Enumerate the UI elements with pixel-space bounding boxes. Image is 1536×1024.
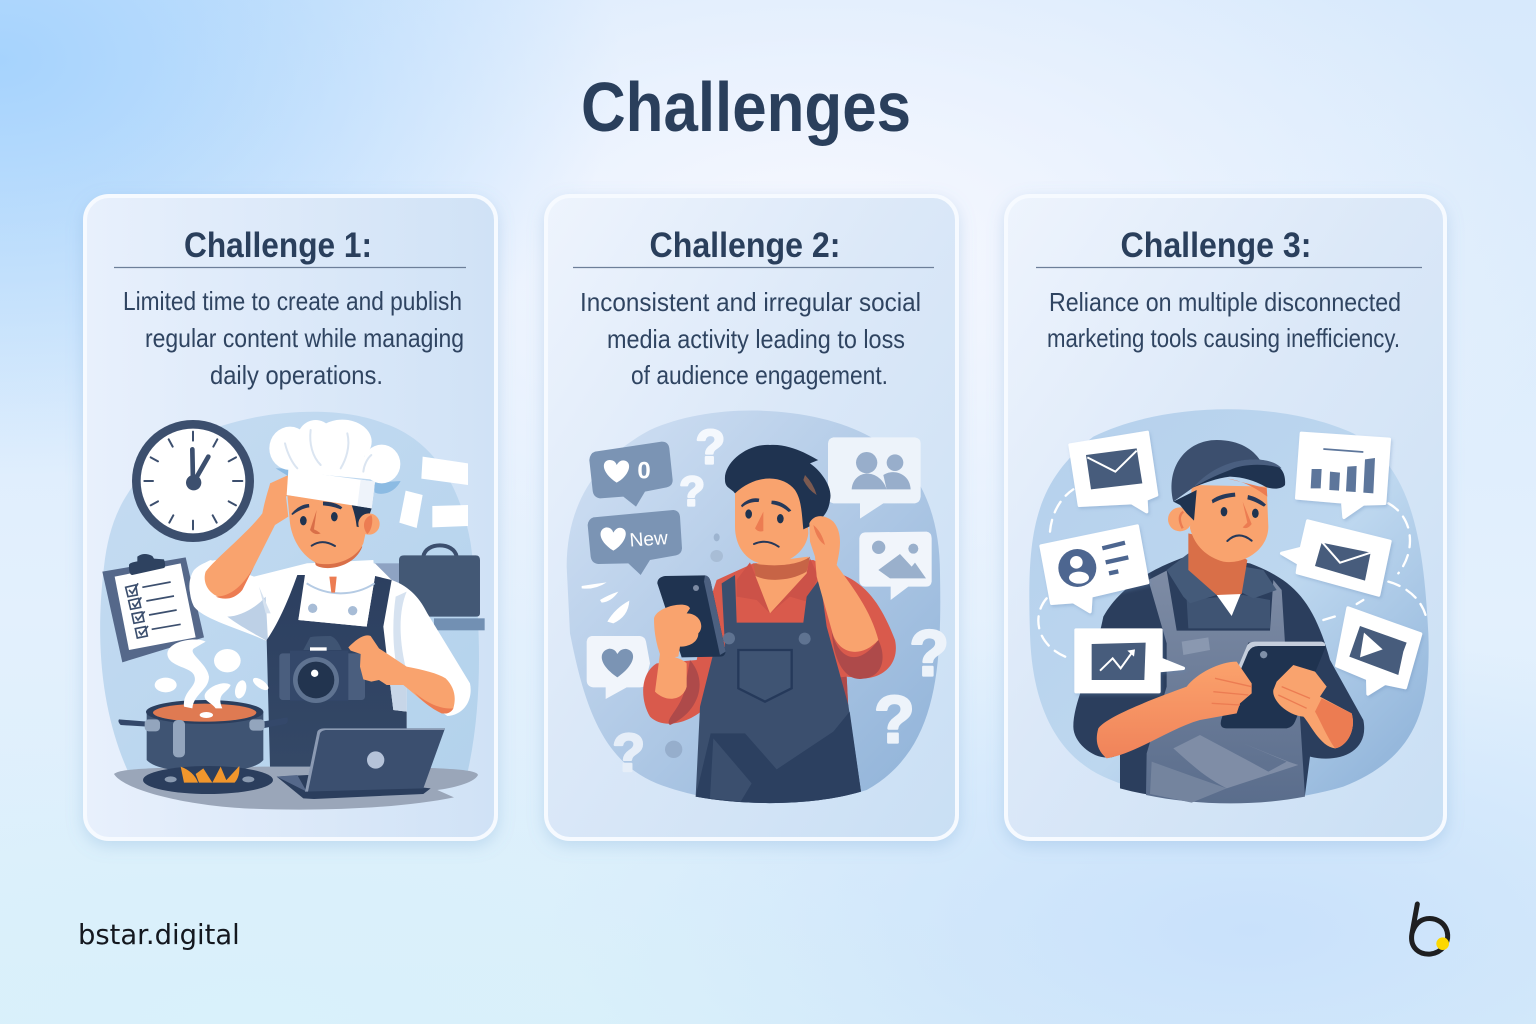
bubble: profile card [1041,526,1148,612]
title: Challenges [581,68,911,146]
question marks: ? [696,420,725,474]
body text: challenge 1: daily operations. [210,360,383,390]
clock [132,420,254,542]
bubble: heart new [588,510,682,575]
cap [1172,440,1285,502]
raised right arm and hand [809,516,878,652]
worker arms and hands [1097,662,1353,758]
overall bib [1146,571,1305,803]
bubble: heart zero: 0 [637,457,651,484]
steam [155,639,270,708]
head [725,445,831,564]
panel: challenge 3 [1006,196,1445,839]
question marks: ? [874,684,915,758]
phone [657,575,726,657]
question marks: ? [612,724,645,783]
flying paper notes [399,457,468,528]
bubble: people [828,437,921,519]
tablet [1221,642,1325,728]
bubble: heart new: New [629,528,669,552]
body text: challenge 3 [1047,287,1401,353]
speech dashes and dots [582,533,723,758]
body text: challenge 2: Inconsistent and irregular social [580,287,921,317]
burner and flame [143,766,273,794]
illustration: man with tablet and disconnected tools [1029,409,1429,803]
hand on phone [654,605,701,658]
body text: challenge 1: regular content while managing [145,323,464,353]
bubble: image [859,532,932,600]
apron pocket [738,650,792,702]
body text: challenge 3: marketing tools causing inefficiency. [1047,323,1400,353]
bubble: heart [587,636,650,699]
background blob [1029,409,1429,802]
card background [546,196,957,839]
worker torso [1073,553,1364,803]
background blob [100,412,479,773]
left arm [655,653,687,699]
body text: challenge 2: of audience engagement. [631,360,888,390]
question marks [612,420,949,783]
illustration: worried man with phone [567,411,949,803]
bubble: bar chart [1297,433,1389,517]
heading: challenge 3: Challenge 3: [1120,226,1312,265]
shirt and collar [1187,595,1270,628]
body text: challenge 3: Reliance on multiple disconnected [1049,287,1401,317]
apron [267,575,407,767]
camera [279,636,365,703]
background blob [567,411,940,803]
shirt collar [737,558,818,613]
bubble: heart zero [589,442,673,507]
chef head [287,495,380,564]
cooking pot [118,700,288,772]
kitchen pot on shelf [374,545,485,630]
man torso with red shirt [643,560,896,725]
logo [1412,904,1449,954]
question marks: ? [679,467,705,514]
panel: challenge 2 [546,196,957,839]
body text: challenge 2 [580,287,921,390]
question marks: ? [909,616,949,689]
bubble: video [1337,608,1421,694]
clipboard checklist [102,554,204,662]
footer brand name: bstar.digital [78,920,240,951]
heading: challenge 1: Challenge 1: [184,226,372,265]
card background [85,196,496,839]
dashed connectors [1038,489,1427,657]
bubble: email right [1282,521,1390,595]
chef raised arm [189,475,293,614]
jacket collar [298,560,375,627]
neck [755,557,808,613]
body text: challenge 1: Limited time to create and publish [123,286,462,316]
floor shadow [114,767,478,810]
laptop [277,728,445,799]
body text: challenge 1 [123,286,464,390]
bubble: email [1070,432,1157,512]
apron [696,575,861,803]
illustration: overwhelmed chef [100,412,485,810]
chef body [190,540,471,767]
bubble: trend chart [1076,630,1183,692]
heading: challenge 2: Challenge 2: [650,226,840,265]
hand on camera [348,635,455,714]
neck and head [1168,478,1268,595]
body text: challenge 2: media activity leading to loss [607,324,905,354]
chef hat [269,420,401,508]
card background [1006,196,1445,839]
panel: challenge 1 [85,196,496,839]
